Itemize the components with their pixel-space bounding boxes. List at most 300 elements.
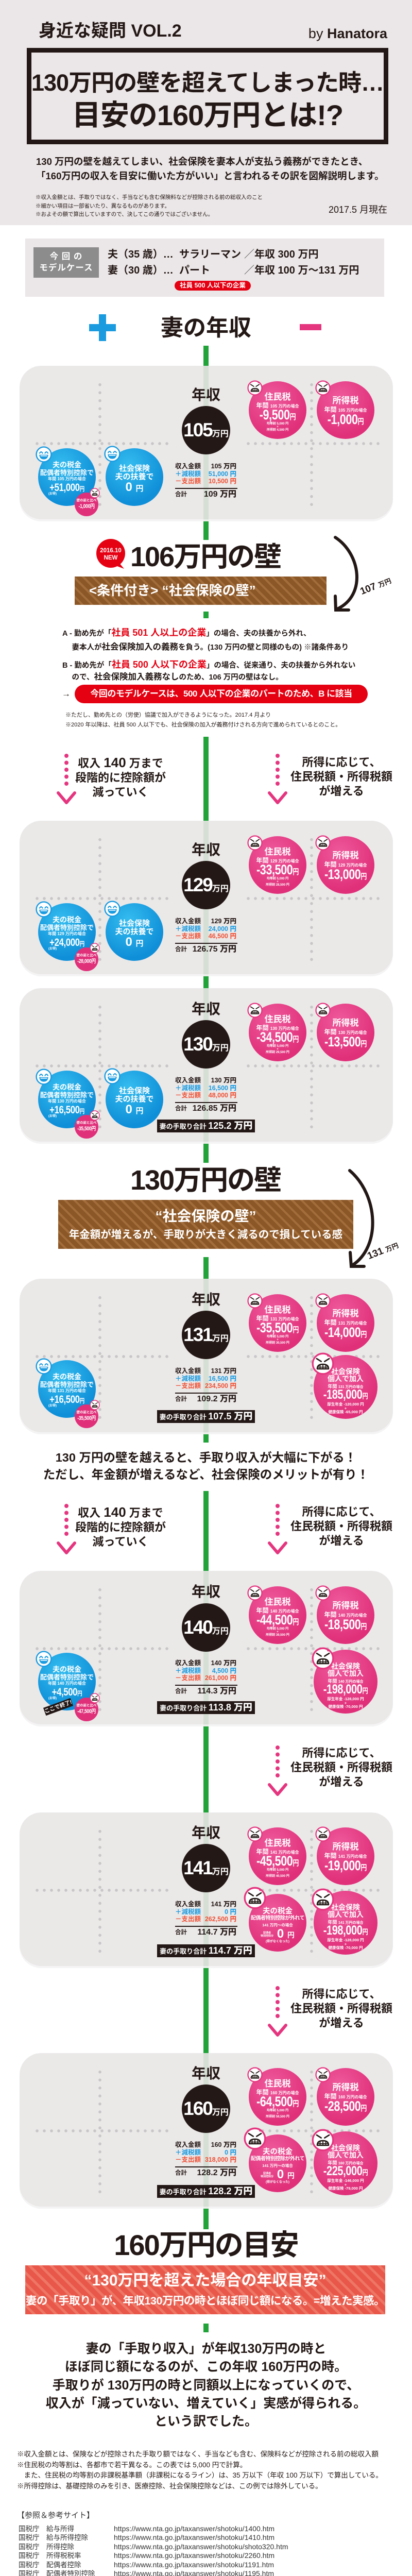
notes: ※細かい項目は一部省いたり、異なるものがあります。 <box>36 203 170 209</box>
circle: 夫の税金 <box>38 448 96 506</box>
circle: 夫の税金: 夫の税金 <box>53 1665 81 1673</box>
text: 所得に応じて 4: が増える <box>319 2016 364 2029</box>
icon: smile <box>104 1068 121 1084</box>
icon: smile <box>36 446 52 463</box>
icon: smile <box>36 901 52 917</box>
circle: 住民税: 年間 105 万円の場合 <box>256 402 299 409</box>
table: 105: 収入金額 <box>175 463 201 470</box>
circle: 夫の税金: +4,500円 <box>52 1686 82 1698</box>
circle: 所得税: 年間 140 万円の場合 <box>324 1611 367 1618</box>
text: 収入140万まで 2 <box>75 1504 166 1548</box>
circle: 夫の税金: 年間 105 万円の場合 <box>48 477 86 481</box>
table: 105: ＋減税額 <box>175 470 201 477</box>
circle: 住民税: -64,500円 <box>256 2094 299 2109</box>
bubble: 壁の前と比べ -1,000円: -1,000円 <box>79 503 94 510</box>
circle: 夫の税金 外れて: 141 万円～の場合 <box>262 1923 293 1927</box>
references: https://www.nta.go.jp/taxanswer/shotoku/1410.htm <box>114 2533 274 2541</box>
text: conclusion: 妻の「手取り収入」が年収130万円の時と <box>86 2342 326 2356</box>
circle: 夫の税金 <box>38 903 96 961</box>
panel: 年収141万円 <box>20 1812 393 1968</box>
label: 今回のモデルケース <box>33 247 99 278</box>
table: 129: 24,000 円 <box>209 925 236 933</box>
circle: 所得税 <box>317 1294 374 1352</box>
circle: 住民税: -9,500円 <box>260 407 296 422</box>
text: conclusion: という訳でした。 <box>154 2414 258 2429</box>
circle: 住民税: 住民税 <box>265 1597 290 1607</box>
title box <box>27 48 388 144</box>
circle: 社会保険 個人で加入: 健康保険 -65,000 円 <box>328 1410 363 1414</box>
circle: 夫の税金 外れて: (得がなくなった) <box>266 1940 289 1943</box>
label: 年収: 年収 <box>192 1584 220 1600</box>
panel: 年収140万円 <box>20 1571 393 1726</box>
table: 140: －支出額 <box>175 1674 201 1682</box>
table: 140: 収入金額 <box>175 1659 201 1667</box>
references: https://www.nta.go.jp/taxanswer/shotoku/1191.htm <box>114 2561 274 2569</box>
circle: 夫の税金 外れて: 特別控除分 <box>261 2175 273 2178</box>
arrow: right 税額が増える 4 <box>267 1986 288 2038</box>
label: 年収: 年収 <box>192 1292 220 1308</box>
circle: 社会保険 個人で加入: 社会保険 <box>331 1367 360 1376</box>
circle: 社会保険 個人で加入: 健康保険 -70,000 円 <box>328 1945 363 1950</box>
circle: 社会保険 個人で加入 <box>314 1650 377 1714</box>
text: 所得に応じて住民税額・所得税額が増える <box>290 756 392 798</box>
table: 141: 141 万円 <box>211 1901 236 1908</box>
table: 129: 収入金額 <box>175 918 201 925</box>
panel: model case: サラリーマン <box>179 249 241 260</box>
icon: angry <box>247 1293 263 1309</box>
circle: 住民税: 年間 160 万円の場合 <box>256 2089 299 2096</box>
circle: 夫の税金: 配偶者特別控除で <box>40 1091 94 1099</box>
circle: 住民税: + <box>277 1048 279 1051</box>
icon: smile 2 <box>104 446 121 462</box>
circle: 住民税: 所得割 29,500 円 <box>266 1051 289 1054</box>
circle: 住民税 <box>249 1827 306 1885</box>
callout: モデルケースはBに該当 <box>62 685 368 703</box>
title line 2: 目安の160万円とは!? <box>72 99 343 131</box>
panel: model case: 年収 100 万～131 万円 <box>254 265 359 276</box>
references: 国税庁 配偶者控除 <box>19 2561 81 2569</box>
circle: 住民税: 均等割 5,000 円 <box>267 1628 288 1631</box>
text: 収入140万まで段階的に控除額が減っていく: 段階的に控除額が <box>75 771 166 784</box>
text: 収入140万まで 2: 段階的に控除額が <box>75 1521 166 1534</box>
circle: 所得税 <box>317 381 374 439</box>
table: 141: 収入金額 <box>175 1901 201 1908</box>
banner: 130万円を超えた場合の年収目安 <box>25 2265 385 2314</box>
text: B case: ので、社会保険加入義務なしのため、106 万円の壁はなし。 <box>72 672 283 682</box>
text: 収入140万まで段階的に控除額が減っていく: 収入 140 万まで <box>78 755 163 770</box>
circle: 社会保険 個人で加入: 厚生年金 -128,000 円 <box>327 1697 364 1701</box>
circle: 住民税: 均等割 5,000 円 <box>267 2109 288 2112</box>
circle: 社会保険 個人で加入: 健康保険 -79,000 円 <box>328 2186 363 2191</box>
banner: 社会保険の壁 <box>58 1200 353 1249</box>
table: 140 <box>175 1659 236 1697</box>
panel: 年収160万円 <box>20 2053 393 2209</box>
panel: 年収129万円 <box>20 821 393 976</box>
circle: 夫の税金: +51,000円 <box>49 482 84 494</box>
icon: angry <box>315 1826 331 1842</box>
table: 130: 合計 <box>175 1106 187 1112</box>
table: 160: 収入金額 <box>175 2141 201 2148</box>
circle: 141万円: 141万円 <box>183 1857 229 1878</box>
circle: 社会保険 個人で加入: 年間 131 万円の場合 <box>328 1384 364 1389</box>
label: 131万円: 131 万円 <box>366 1242 400 1262</box>
circle: 社会保険 夫の扶養: 夫の扶養で <box>115 472 153 481</box>
notes: bottom: ※収入金額とは、保険などが控除された手取り額ではなく、手当なども含む、保険料などが控除される前の総収入額 <box>17 2450 379 2458</box>
bubble: -35,500円: 壁の前と比べ <box>76 1411 97 1414</box>
table: 130: 16,500 円 <box>209 1084 236 1091</box>
circle: 社会保険 夫の扶養: 0 円 <box>125 935 144 949</box>
badge: 2016.10 NEW: NEW <box>104 555 117 561</box>
text: 所得に応じて住民税額・所得税額が増える: 所得に応じて、 <box>302 756 381 769</box>
circle: 住民税: + <box>277 426 279 429</box>
text: 所得に応じて住民税額・所得税額が増える: が増える <box>319 785 364 798</box>
bubble: -35,500円: -35,500円 <box>77 1415 96 1421</box>
circle: 住民税: 所得割 4,500 円 <box>267 429 288 432</box>
icon: angry <box>315 1293 331 1309</box>
circle: 夫の税金: (お得) <box>48 1404 57 1408</box>
banner: 130万円を超えた場合の年収目安: “130万円を超えた場合の年収目安” <box>84 2272 327 2289</box>
circle: 住民税 <box>249 1004 306 1061</box>
bubble: -28,000円 <box>75 947 98 971</box>
circle: 社会保険 個人で加入: 社会保険 <box>331 1662 360 1670</box>
table: 131: 109.2 万円 <box>197 1394 236 1403</box>
arrow: curved to 131万円 <box>348 1169 374 1268</box>
table: 140: ＋減税額 <box>175 1667 201 1674</box>
text: 所得に応じて 2 <box>274 1505 408 1548</box>
text: 収入140万まで 2: 減っていく <box>93 1535 148 1548</box>
icon: minus <box>300 324 321 330</box>
bubble: -47,500円: 壁の前と比べ <box>76 1704 97 1707</box>
references: 国税庁 給与所得 <box>19 2525 74 2533</box>
table: 141: 0 円 <box>225 1908 236 1916</box>
circle: 夫の税金 <box>38 1653 96 1710</box>
panel: model case: 年収 300 万円 <box>254 249 318 260</box>
circle: 住民税: + <box>277 1872 279 1875</box>
text: 収入140万まで段階的に控除額が減っていく <box>75 755 166 799</box>
circle: 住民税: 年間 130 万円の場合 <box>256 1024 299 1031</box>
table: 131: 131 万円 <box>211 1367 236 1375</box>
icon: angry 住民税 <box>247 380 263 396</box>
table: 130: ＋減税額 <box>175 1084 201 1091</box>
icon: angry <box>315 1003 331 1018</box>
circle: 夫の税金 外れて: 配偶者 <box>263 2172 271 2175</box>
table: 105: 10,500 円 <box>209 478 236 485</box>
circle: 夫の税金 外れて: 夫の税金 <box>263 2148 293 2156</box>
circle: 夫の税金 外れて: 特別控除分 <box>261 1935 273 1938</box>
circle: 所得税: 所得税 <box>333 2082 358 2092</box>
text: 130万円の壁を越えると <box>43 1451 369 1481</box>
icon: smile <box>36 1069 52 1085</box>
references: 国税庁 所得税税率 <box>19 2552 81 2560</box>
label: 年収: 年収 <box>192 2065 220 2081</box>
notes: 106: ※ただし、勤め先との（労使）協議で加入ができるようになった。2017.4 月より <box>65 712 271 718</box>
circle: 夫の税金 外れて: 141 万円～の場合 <box>262 2163 293 2168</box>
text: 所得に応じて住民税額・所得税額が増える: 住民税額・所得税額 <box>290 770 392 783</box>
table: 105: －支出額 <box>175 478 201 485</box>
table: 130: 126.85 万円 <box>193 1104 236 1113</box>
references: 国税庁 所得控除 <box>19 2543 74 2551</box>
circle: 夫の税金: 配偶者特別控除で <box>40 1673 94 1681</box>
text: B case: B - 勤め先が「社員 500 人以下の企業」の場合、従来通り、夫の扶養から外れない <box>62 659 355 670</box>
badge: 2016.10 NEW: 2016.10 <box>100 548 122 554</box>
label: 年収: 年収 <box>192 1001 220 1017</box>
circle: 社会保険 夫の扶養 <box>106 1071 163 1128</box>
label: 年収: 年収 <box>192 842 220 858</box>
bubble: 壁の前と比べ -1,000円 <box>75 493 98 516</box>
circle: 夫の税金: 配偶者特別控除で <box>40 1381 94 1388</box>
text: 所得に応じて 3: 所得に応じて、 <box>302 1747 381 1759</box>
text: 所得に応じて 4 <box>274 1987 408 2030</box>
circle: 社会保険 個人で加入: + <box>345 1941 347 1946</box>
text: 所得に応じて 4: 所得に応じて、 <box>302 1988 381 2001</box>
circle: 131万円 <box>182 1311 230 1359</box>
circle: 社会保険 夫の扶養: 社会保険 <box>119 1087 150 1095</box>
circle: 夫の税金 外れて: 配偶者 <box>263 1931 271 1935</box>
text: conclusion: 手取りが 130万円の時と同額以上になっていくので、 <box>53 2378 359 2393</box>
circle: 住民税: -33,500円 <box>256 862 299 877</box>
circle: 社会保険 個人で加入: 厚生年金 -146,000 円 <box>327 2178 364 2183</box>
table: 160: 合計 <box>175 2170 187 2176</box>
circle: 社会保険 個人で加入: 年間 141 万円の場合 <box>328 1920 364 1925</box>
circle: 住民税 <box>249 381 306 439</box>
bubble: -28,000円: -28,000円 <box>77 958 96 964</box>
circle: 社会保険 個人で加入: 年間 160 万円の場合 <box>328 2160 364 2165</box>
table: 131: 16,500 円 <box>209 1375 236 1382</box>
circle: 所得税: -28,500円 <box>324 2098 367 2114</box>
circle: 住民税: 均等割 5,000 円 <box>267 1045 288 1048</box>
banner: 社会保険の壁: 年金額が増えるが、手取りが大きく減るので損している感 <box>69 1229 342 1241</box>
circle: 105万円: 105万円 <box>183 419 229 440</box>
circle: 住民税: 住民税 <box>265 392 290 402</box>
bubble: -47,500円: -47,500円 <box>77 1708 96 1715</box>
text: 収入140万まで 2: 収入 140 万まで <box>78 1504 163 1520</box>
takehome: 113.8万円: 妻の手取り合計 113.8 万円 <box>160 1702 252 1713</box>
circle: 住民税: 所得割 39,500 円 <box>266 1634 289 1637</box>
circle: 夫の税金: +16,500円 <box>49 1394 84 1405</box>
circle: 所得税: -18,500円 <box>324 1617 367 1632</box>
table: 131: －支出額 <box>175 1382 201 1389</box>
bubble: -35,500円 <box>75 1115 98 1139</box>
text: 所得に応じて 4: 住民税額・所得税額 <box>290 2002 392 2015</box>
circle: 141万円 <box>182 1844 230 1892</box>
circle: 夫の税金: 年間 129 万円の場合 <box>48 931 86 936</box>
notes: 106 <box>65 712 341 728</box>
circle: 夫の税金: 夫の税金 <box>53 461 81 469</box>
circle: 住民税: -45,500円 <box>256 1853 299 1869</box>
text: 所得に応じて 3: が増える <box>319 1775 364 1788</box>
table: 130 <box>175 1077 237 1113</box>
circle: 夫の税金: 配偶者特別控除で <box>40 924 94 931</box>
icon: angry big <box>244 2127 266 2150</box>
circle: 社会保険 個人で加入: 年間 140 万円の場合 <box>328 1679 364 1684</box>
table: 130: －支出額 <box>175 1092 201 1099</box>
circle: 社会保険 個人で加入: + <box>345 2182 347 2187</box>
timeline green line segments <box>203 346 209 540</box>
table: 140: 114.3 万円 <box>197 1687 236 1695</box>
table: 131 <box>175 1367 237 1403</box>
bubble: -35,500円: 壁の前と比べ <box>76 1121 97 1125</box>
arrow: right 税額が増える 2 <box>267 1504 288 1555</box>
circle: 129万円: 129万円 <box>183 874 229 895</box>
circle: 社会保険 個人で加入 <box>314 2131 377 2195</box>
circle: 所得税: 年間 160 万円の場合 <box>324 2093 367 2100</box>
table: 131: 234,500 円 <box>205 1382 236 1389</box>
references: https://www.nta.go.jp/taxanswer/shotoku/1400.htm <box>114 2524 274 2533</box>
notes: bottom <box>17 2449 383 2492</box>
icon: smile <box>104 901 121 917</box>
panel: model case <box>25 239 384 297</box>
icon: angry <box>315 2067 331 2082</box>
banner: 条件付き 社会保険の壁 <box>75 577 327 605</box>
table: 140: 4,500 円 <box>212 1667 236 1674</box>
circle: 夫の税金 外れて: 0 円 <box>277 1927 295 1941</box>
takehome: 125.2万円: 妻の手取り合計 125.2 万円 <box>160 1121 252 1131</box>
table: 130: 130 万円 <box>211 1077 236 1084</box>
table: 141: 262,500 円 <box>205 1916 236 1923</box>
text: 所得に応じて 3 <box>274 1746 408 1789</box>
circle: 社会保険 個人で加入: 厚生年金 -128,000 円 <box>327 1938 364 1942</box>
circle: 住民税: 所得割 59,500 円 <box>266 2115 289 2119</box>
heading: 妻の年収: 妻の年収 <box>161 315 251 341</box>
circle: 所得税: 年間 105 万円の場合 <box>324 406 367 413</box>
circle: 住民税: + <box>277 880 279 884</box>
table: 160: 0 円 <box>225 2148 236 2156</box>
table: 160: 160 万円 <box>211 2141 236 2148</box>
text: 収入140万まで段階的に控除額が減っていく: 減っていく <box>93 786 148 799</box>
circle: 160万円 <box>182 2084 230 2133</box>
circle: 住民税: 均等割 5,000 円 <box>267 877 288 880</box>
circle: 夫の税金 外れて: 0 円 <box>277 2167 295 2181</box>
references: https://www.nta.go.jp/taxanswer/shotoku/2260.htm <box>114 2551 274 2560</box>
icon: plus <box>89 314 116 341</box>
circle: 夫の税金 外れて: 配偶者特別控除が外れて <box>251 1916 304 1921</box>
circle: 住民税: 年間 141 万円の場合 <box>256 1848 299 1855</box>
callout: モデルケースはBに該当: 今回のモデルケースは、500 人以下の企業のパートのため、B に該当 <box>90 689 352 699</box>
circle: 社会保険 個人で加入: 個人で加入 <box>328 1910 364 1919</box>
circle: 住民税: 住民税 <box>265 1838 290 1848</box>
icon: angry big <box>244 1887 266 1909</box>
circle: 住民税: + <box>277 2112 279 2115</box>
circle: 夫の税金 <box>38 1071 96 1128</box>
circle: 社会保険 夫の扶養: 夫の扶養で <box>115 927 153 936</box>
circle: 夫の税金: 夫の税金 <box>53 916 81 924</box>
takehome: 128.2万円: 妻の手取り合計 128.2 万円 <box>160 2186 252 2196</box>
table: 131: ＋減税額 <box>175 1375 201 1382</box>
banner: 130万円を超えた場合の年収目安: 妻の「手取り」が、年収130万円の時とほぼ同じ額になる。=増えた実感。 <box>26 2295 385 2307</box>
circle: 住民税: 住民税 <box>265 847 290 857</box>
circle: 住民税 <box>249 1294 306 1352</box>
circle: 140万円 <box>182 1603 230 1652</box>
table: 105 <box>175 463 237 499</box>
table: 129: 合計 <box>175 946 187 952</box>
circle: 住民税: 均等割 5,000 円 <box>267 1335 288 1338</box>
icon: angry <box>247 1585 263 1601</box>
table: 131: 合計 <box>175 1396 187 1402</box>
circle: 所得税: 年間 130 万円の場合 <box>324 1028 367 1036</box>
circle: 社会保険 個人で加入: 個人で加入 <box>328 2151 364 2159</box>
table: 160: ＋減税額 <box>175 2148 201 2156</box>
circle: 所得税: 所得税 <box>333 396 358 405</box>
circle: 住民税: + <box>277 1338 279 1342</box>
table: 129 <box>175 918 237 953</box>
circle: 住民税: 所得割 40,500 円 <box>266 1875 289 1878</box>
panel: 年収130万円 <box>20 988 393 1144</box>
circle: 夫の税金: 年間 140 万円の場合 <box>48 1681 86 1686</box>
circle: 住民税: -34,500円 <box>256 1029 299 1045</box>
text: 130万円の壁を越えると: 130 万円の壁を越えると、手取り収入が大幅に下がる！ <box>56 1451 356 1464</box>
badge: 2016.10 NEW <box>96 539 125 569</box>
table: 129: 129 万円 <box>211 918 236 925</box>
intro text: 130 万円の壁を越えてしまい、社会保険を妻本人が支払う義務ができたとき、 <box>36 156 368 167</box>
notes: ※およその額で算出していますので、決してこの通りではございません。 <box>36 211 213 217</box>
circle: 社会保険 個人で加入: 個人で加入 <box>328 1669 364 1677</box>
panel: model case: ／ <box>244 249 254 260</box>
takehome: 114.7万円: 妻の手取り合計 114.7 万円 <box>160 1945 252 1956</box>
circle: 所得税: -19,000円 <box>324 1858 367 1873</box>
circle: 社会保険 個人で加入: 健康保険 -70,000 円 <box>328 1704 363 1709</box>
circle: 所得税: 年間 129 万円の場合 <box>324 861 367 868</box>
circle: 夫の税金: (お得) <box>48 493 57 496</box>
callout: モデルケースはBに該当: → <box>62 689 71 699</box>
panel: 年収105万円 <box>20 366 393 521</box>
circle: 夫の税金: +16,500円 <box>49 1104 84 1116</box>
circle: 社会保険 個人で加入 <box>314 1355 377 1419</box>
circle: 住民税: 住民税 <box>265 2079 290 2089</box>
circle: 夫の税金 外れて <box>249 2134 306 2192</box>
circle: 社会保険 夫の扶養 <box>106 448 163 506</box>
references <box>17 2512 398 2576</box>
circle: 社会保険 個人で加入: -198,000円 <box>323 1682 368 1697</box>
circle: 住民税: 均等割 5,000 円 <box>267 422 288 426</box>
circle: 社会保険 個人で加入: 社会保険 <box>331 1903 360 1911</box>
circle: 社会保険 夫の扶養: 0 円 <box>125 480 144 494</box>
table: 140: 261,000 円 <box>205 1674 236 1682</box>
circle: 社会保険 夫の扶養: 0 円 <box>125 1103 144 1116</box>
circle: 所得税 <box>317 1827 374 1885</box>
circle: 社会保険 個人で加入: -225,000円 <box>323 2164 368 2178</box>
circle: 社会保険 個人で加入: + <box>345 1700 347 1705</box>
label: 今回のモデルケース: モデルケース <box>39 263 93 273</box>
label: 年収: 年収 <box>192 387 220 403</box>
circle: 住民税: -35,500円 <box>256 1320 299 1335</box>
panel: model case: パート <box>179 265 210 276</box>
takehome: 107.5万円: 妻の手取り合計 107.5 万円 <box>160 1411 252 1421</box>
banner: 社会保険の壁: “社会保険の壁” <box>155 1208 256 1224</box>
title line 1: 130万円の壁を超えてしまった時… <box>31 70 384 96</box>
text: A case: 妻本人が社会保険加入の義務を負う。(130 万円の壁と同様のもの) ※諸条件あり <box>72 642 349 652</box>
circle: 夫の税金: 夫の税金 <box>53 1083 81 1091</box>
circle: 住民税: 均等割 5,000 円 <box>267 1869 288 1872</box>
circle: 社会保険 個人で加入: + <box>345 1405 347 1411</box>
circle: 夫の税金: 配偶者特別控除で <box>40 469 94 477</box>
circle: 夫の税金: +24,000円 <box>49 937 84 948</box>
text: wife: 妻（30 歳）… <box>108 265 174 276</box>
circle: 所得税: 年間 131 万円の場合 <box>324 1319 367 1326</box>
heading: 参照&参考サイト: 【参照＆参考サイト】 <box>17 2511 94 2520</box>
table: 141 <box>175 1901 236 1938</box>
references: https://www.nta.go.jp/taxanswer/shotoku/shoto320.htm <box>114 2543 288 2551</box>
circle: 所得税: -14,000円 <box>324 1325 367 1340</box>
text: conclusion <box>0 2340 412 2431</box>
circle: 住民税: 年間 129 万円の場合 <box>256 857 299 864</box>
arrow: right 税額が増える <box>268 754 287 804</box>
circle: 所得税 <box>317 2068 374 2126</box>
circle: 105万円 <box>182 406 230 454</box>
table: 130: 48,000 円 <box>209 1092 236 1099</box>
circle: 社会保険 個人で加入: 個人で加入 <box>328 1375 364 1383</box>
circle: 所得税: -13,500円 <box>324 1034 367 1049</box>
circle: 所得税 <box>317 836 374 894</box>
